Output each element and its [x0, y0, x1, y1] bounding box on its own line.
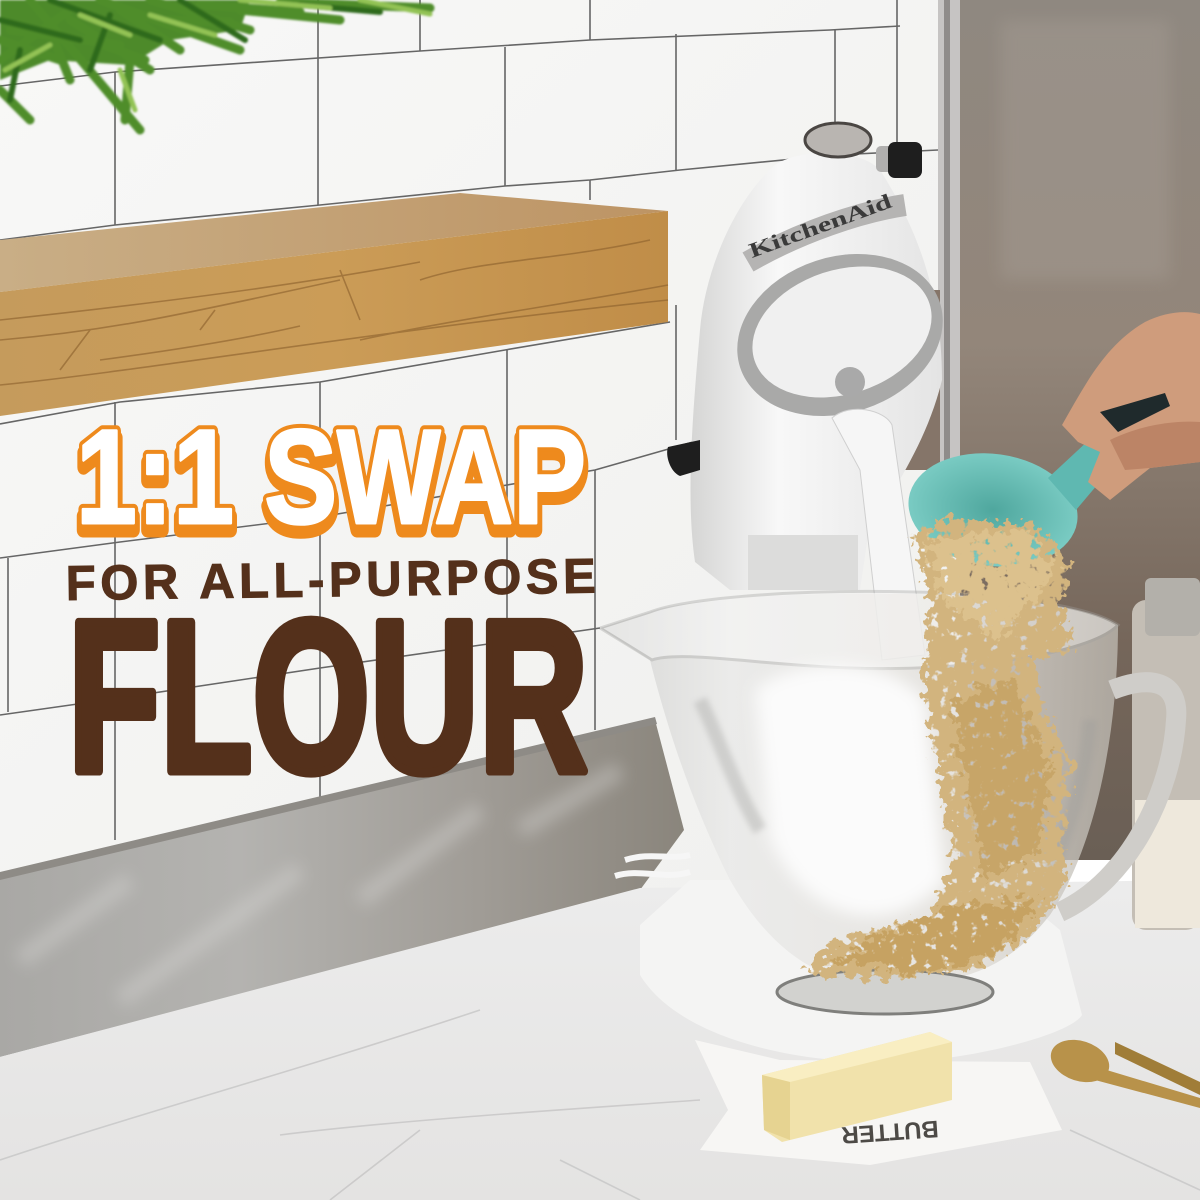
headline: 1:1 SWAP: 1:1 SWAP: [76, 403, 586, 552]
power cord: [615, 855, 690, 876]
headline: [65, 403, 596, 817]
fridge panel: [905, 0, 1200, 860]
hand holding cup: [1062, 312, 1200, 500]
plant: [0, 0, 430, 130]
glass jar: [1132, 578, 1200, 930]
marble countertop: [0, 880, 1200, 1200]
gold measuring spoons: [1045, 1033, 1200, 1108]
measuring cup: [901, 426, 1130, 577]
mixer body: [691, 153, 942, 590]
butter on wrapper: [695, 1032, 1062, 1165]
bowl foot: [777, 970, 993, 1014]
headline: 1:1 SWAP: 1:1 SWAP: [76, 403, 586, 552]
beater shaft: [832, 409, 925, 660]
mixer badge and knob: [667, 123, 922, 476]
stand mixer: [615, 123, 1082, 1062]
column shadow: [748, 535, 858, 590]
pouring flour: [805, 518, 1072, 980]
headline: flour: FLOUR: [68, 575, 588, 817]
tiled wall background: [0, 0, 960, 900]
glass mixing bowl: [600, 591, 1176, 1014]
headline: for all-purpose: FOR ALL-PURPOSE: [65, 550, 596, 611]
paddle in bowl: [755, 665, 945, 916]
mixer base: [640, 880, 1082, 1062]
bowl handle: [1060, 682, 1176, 912]
steel backsplash: [0, 717, 684, 1057]
grey reflections: [700, 700, 1090, 910]
wooden shelf: [0, 193, 668, 416]
chrome attachment hub: [716, 228, 964, 442]
headline: 1:1 SWAP: 1:1 SWAP: [76, 410, 586, 559]
chrome band and logo: [746, 189, 905, 263]
chrome band and logo: KitchenAid: [746, 189, 895, 263]
butter on wrapper: BUTTER: [840, 1115, 939, 1148]
